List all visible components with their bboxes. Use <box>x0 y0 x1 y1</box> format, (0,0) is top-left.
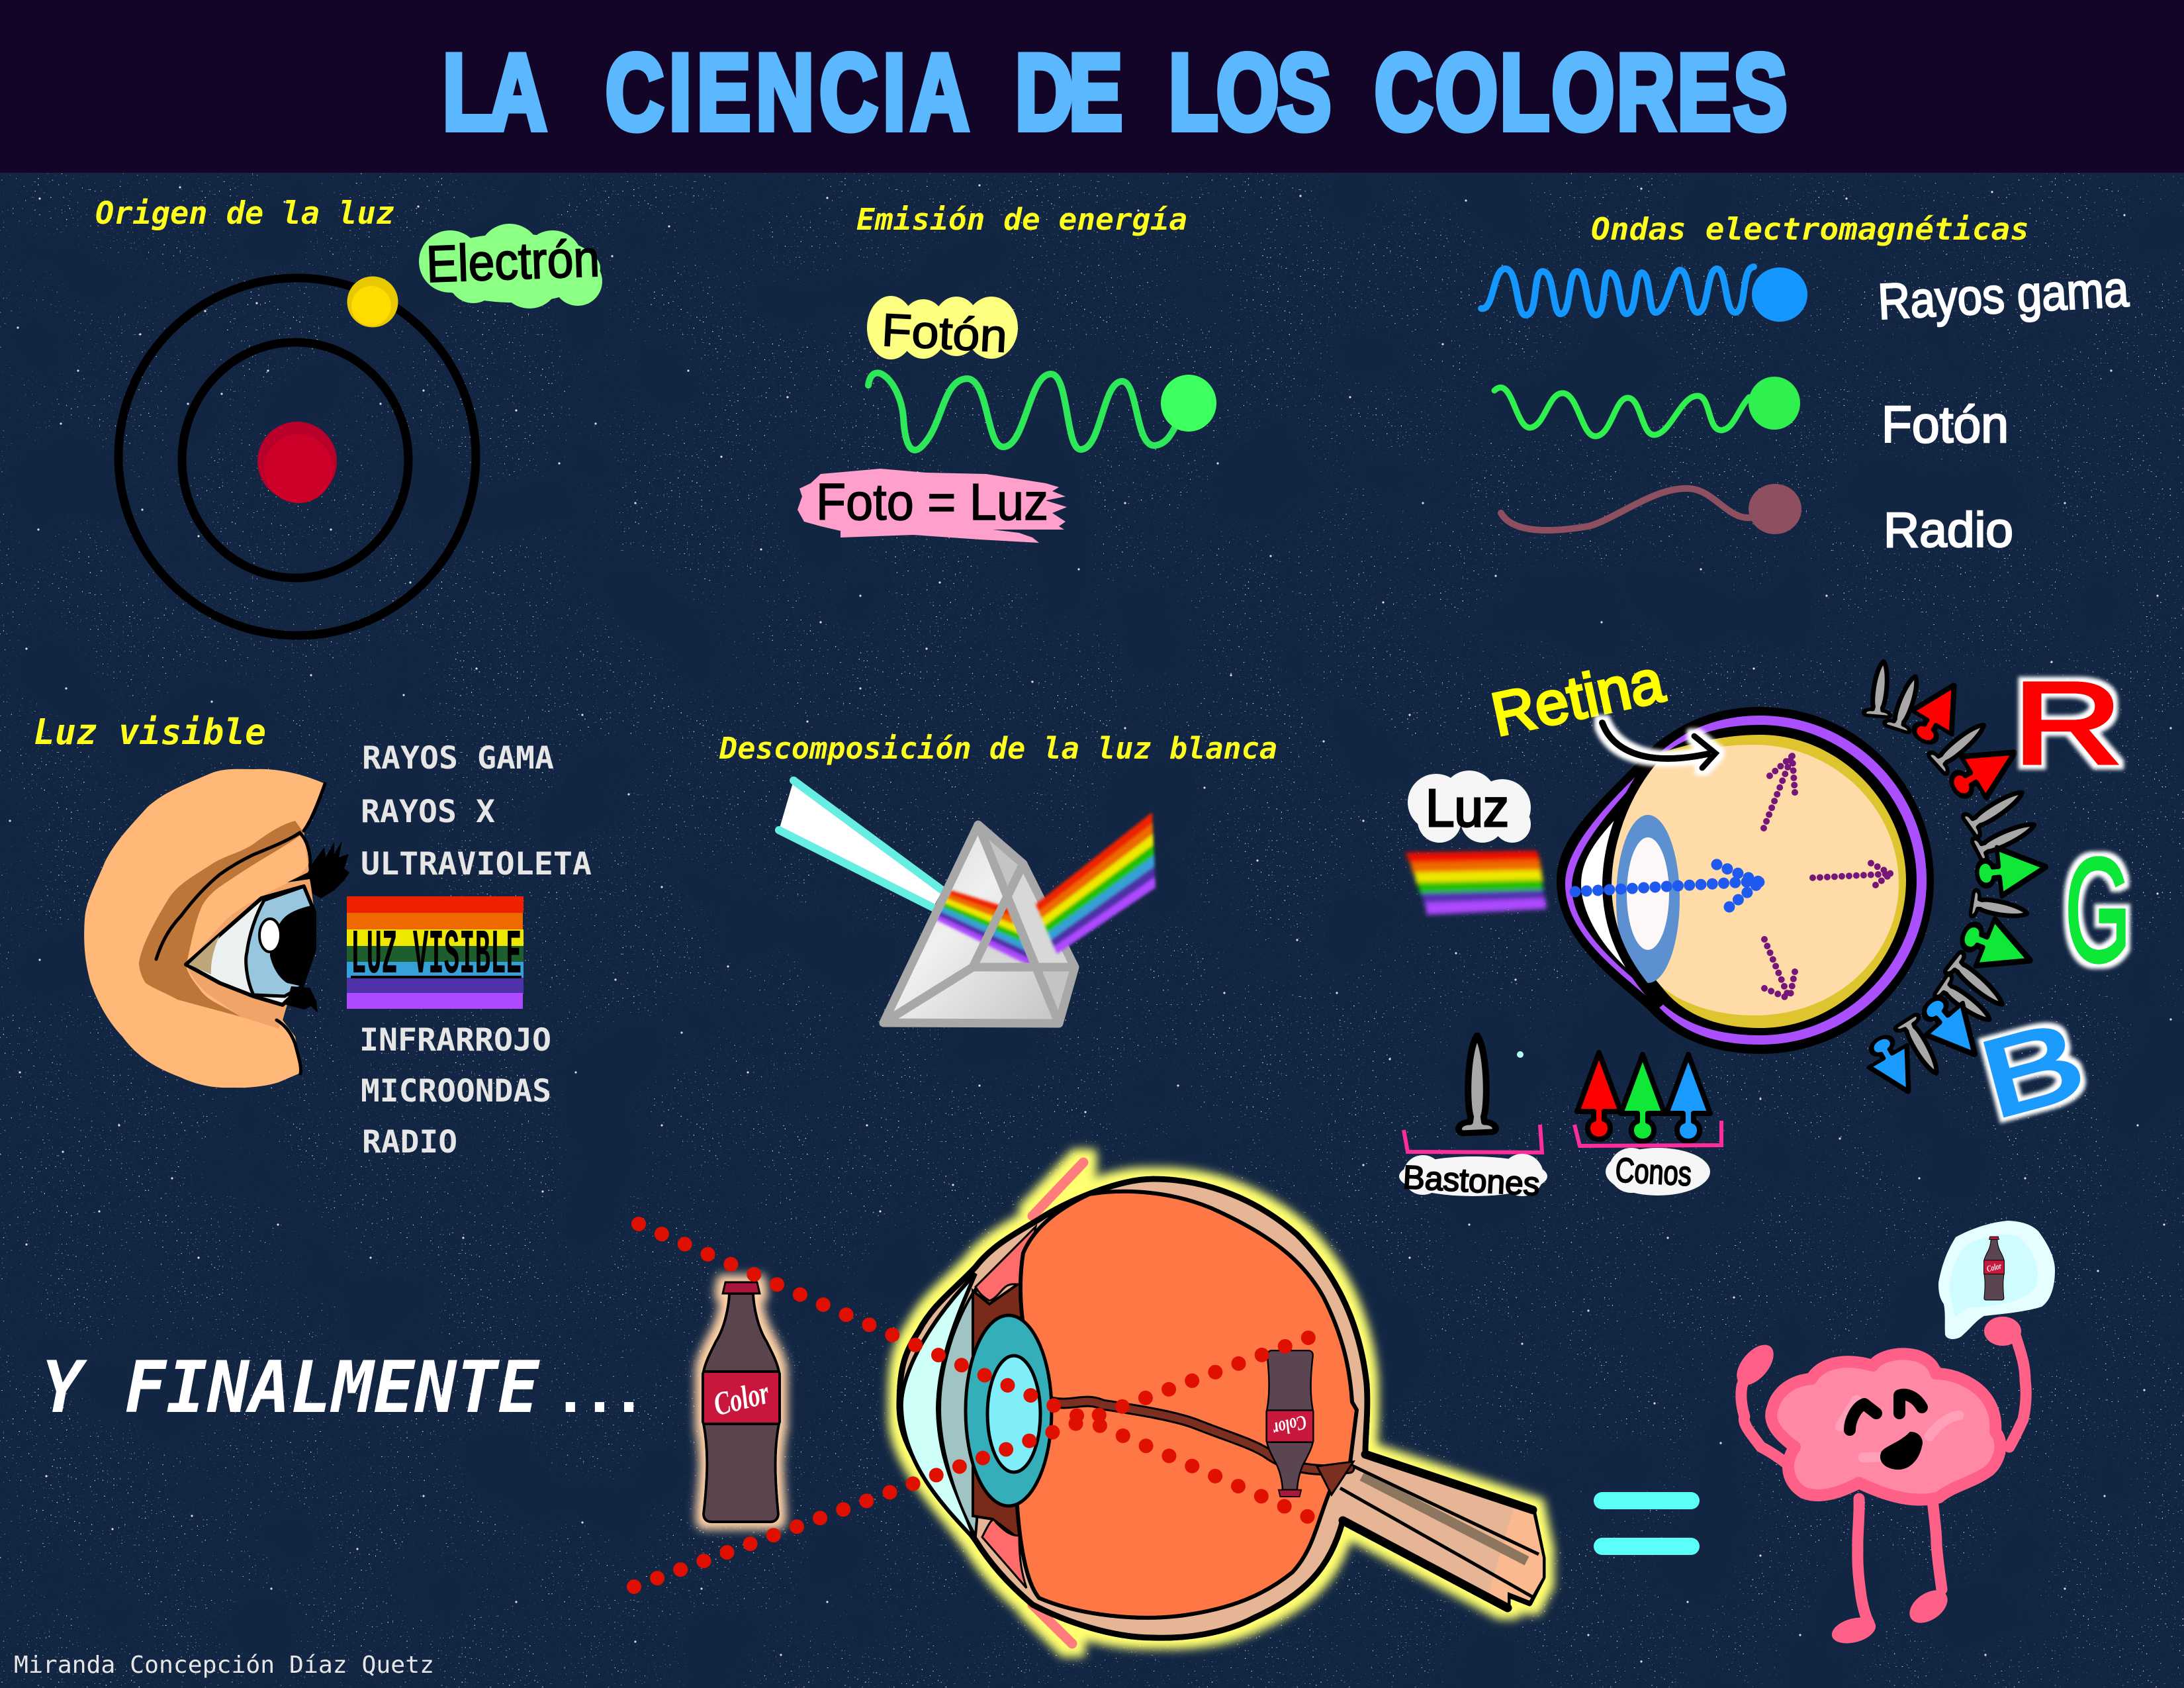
nucleus <box>257 422 337 503</box>
spectrum list: RAYOS X <box>361 794 495 830</box>
prism <box>884 825 1075 1023</box>
iris <box>246 886 314 996</box>
eyelid lines <box>156 784 325 1074</box>
heading: emisión de energía: Emisión de energía <box>856 202 1187 237</box>
label: electrón: Electrón <box>426 229 600 293</box>
ciliary top <box>976 1227 1036 1301</box>
lens <box>966 1315 1052 1506</box>
pupil <box>270 905 315 986</box>
mouth <box>1880 1432 1923 1470</box>
vitreous <box>1607 745 1899 1015</box>
label: fotón: Fotón <box>880 304 1009 362</box>
label: retina: Retina <box>1486 647 1670 749</box>
ciliary bottom <box>982 1520 1026 1588</box>
lashes <box>286 841 349 1013</box>
title: COLORES <box>1375 32 1787 152</box>
atom orbits <box>118 278 476 635</box>
letter R: R <box>2013 659 2122 788</box>
cheek marks <box>1840 1400 1959 1458</box>
heading: y finalmente: ... <box>561 1352 638 1427</box>
hands and feet <box>1730 1317 2021 1648</box>
legend: cones: Conos <box>1614 1151 1692 1194</box>
label: rayos gama: Rayos gama <box>1876 261 2130 330</box>
speech bubble <box>1938 1221 2055 1339</box>
panel: luz visible <box>34 712 592 1160</box>
label: electrón <box>419 224 602 308</box>
letter B: B <box>1968 998 2097 1141</box>
gamma wave <box>1481 267 1807 322</box>
icon: bottle <box>703 1282 780 1522</box>
title: CIENCIA <box>606 32 969 152</box>
panel: origen de la luz <box>95 195 602 635</box>
green photon wave <box>1494 377 1800 436</box>
radio wave <box>1501 484 1801 534</box>
spectrum list <box>359 740 592 1160</box>
title <box>443 32 1787 152</box>
eyeball cross-section <box>1557 707 1934 1054</box>
spectrum list: RADIO <box>362 1124 457 1160</box>
brain body <box>1771 1354 2000 1500</box>
outgoing rainbow <box>1036 812 1156 954</box>
label: luz: Luz <box>1426 778 1509 837</box>
label: fotón: Fotón <box>1882 395 2009 453</box>
spectrum list: MICROONDAS <box>361 1073 551 1109</box>
cornea <box>901 1274 976 1540</box>
white light beam <box>779 780 942 908</box>
arms and legs <box>1741 1337 2026 1623</box>
icon: human eye in profile <box>84 769 349 1088</box>
retina layer <box>1607 735 1906 1028</box>
panel: ondas electromagnéticas <box>1481 211 2130 557</box>
vitreous <box>1017 1192 1357 1618</box>
title: DE <box>1015 32 1122 152</box>
panel: retina <box>1399 647 2131 1203</box>
icon: small bottle <box>1984 1237 2004 1300</box>
electron <box>347 277 398 327</box>
visible light rainbow bar <box>347 896 523 1009</box>
light rays dotted <box>634 1224 1332 1587</box>
rods and cones around the retina <box>1859 659 2049 1103</box>
panel: luz visible: LUZ VISIBLE <box>351 919 522 992</box>
spectrum list: INFRARROJO <box>359 1022 551 1058</box>
face <box>1850 1395 1922 1430</box>
refracted rainbow inside <box>935 890 1034 968</box>
brown shading <box>139 821 304 1017</box>
heading: ondas electromagnéticas: Ondas electromagnéticas <box>1591 211 2029 247</box>
spectrum list: ULTRAVIOLETA <box>361 846 592 882</box>
cornea <box>1581 814 1645 983</box>
skin <box>84 769 325 1088</box>
iris <box>1616 815 1680 983</box>
header band <box>0 0 2184 173</box>
inverted bottle on retina <box>1267 1350 1313 1497</box>
label: luz <box>1408 771 1531 843</box>
label: radio: Radio <box>1884 502 2013 557</box>
eyelid <box>186 835 314 1029</box>
light rainbow <box>1405 851 1547 915</box>
label: foto = luz: Foto = Luz <box>816 473 1048 531</box>
eyeball <box>186 886 314 1005</box>
tear duct <box>189 935 220 974</box>
footer credit: Miranda Concepción Díaz Quetz <box>14 1652 434 1679</box>
spectrum list: RAYOS GAMA <box>362 740 554 776</box>
big eye anatomy <box>899 1162 1543 1644</box>
nerve detail <box>1489 1501 1543 1605</box>
pupil <box>1627 837 1669 950</box>
legend: rods <box>1399 1035 1547 1203</box>
legend: rods: Bastones <box>1402 1158 1541 1203</box>
heading: y finalmente: Y FINALMENTE <box>42 1346 540 1429</box>
happy brain <box>1730 1317 2026 1648</box>
heading: luz visible: Luz visible <box>34 712 266 753</box>
legend: cones <box>1574 1053 1721 1196</box>
panel: emisión de energía <box>797 202 1216 543</box>
arrows: reflected light <box>1764 756 1891 999</box>
title: LOS <box>1169 32 1331 152</box>
eye outline with glow <box>899 1162 1543 1644</box>
letter G: G <box>2065 827 2131 993</box>
arrow: incoming light <box>1575 865 1762 907</box>
optic vessel <box>1052 1401 1349 1470</box>
title: LA <box>443 32 547 152</box>
iris body <box>973 1281 1026 1539</box>
equals sign <box>1594 1492 1700 1555</box>
highlight <box>259 919 281 952</box>
heading: descomposición: Descomposición de la luz blanca <box>719 731 1277 766</box>
panel: descomposición de la luz blanca <box>719 731 1277 1023</box>
heading: origen de la luz: Origen de la luz <box>95 195 394 232</box>
photon wave <box>868 373 1216 450</box>
arrow: retina pointer <box>1602 723 1715 768</box>
